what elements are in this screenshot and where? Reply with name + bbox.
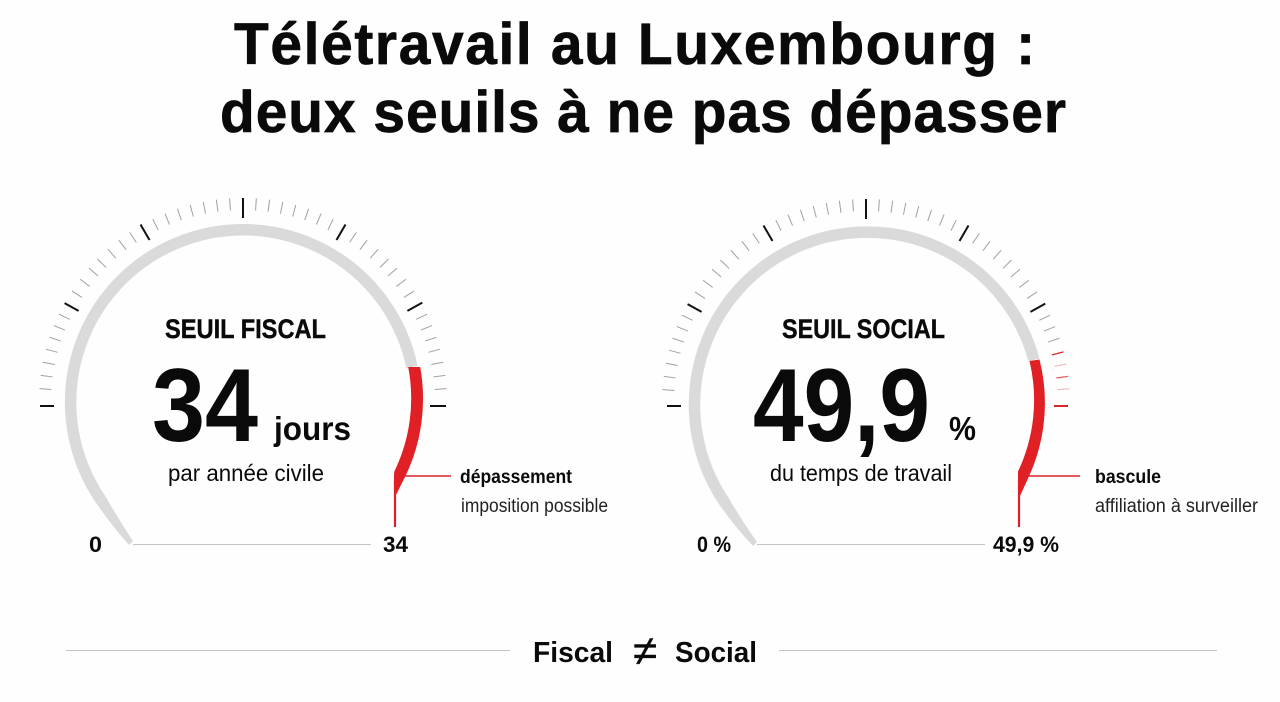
heading: seuil social: SEUIL SOCIAL xyxy=(782,314,945,344)
baseline scale: social xyxy=(757,544,985,546)
value: 49,9 %: % xyxy=(949,410,976,447)
scale label: 34: 34 xyxy=(383,532,409,557)
footer: fiscal differs from social xyxy=(66,627,1217,674)
callout: dépassement xyxy=(405,467,608,517)
footer: fiscal differs from social: ≠ xyxy=(633,627,657,674)
value: 49,9 %: 49,9 xyxy=(753,348,930,464)
caption: par année civile: par année civile xyxy=(168,460,324,486)
gauge scale ticks: social xyxy=(662,199,1070,406)
panel: seuil fiscal gauge xyxy=(39,198,608,557)
heading: seuil fiscal: SEUIL FISCAL xyxy=(165,314,326,344)
red threshold arc: fiscal xyxy=(394,367,423,527)
scale label: 49,9 %: 49,9 % xyxy=(993,532,1059,557)
value: 34 jours xyxy=(152,348,351,464)
callout: bascule xyxy=(1028,467,1259,517)
gauge track: social xyxy=(695,232,1034,546)
footer: fiscal differs from social: Fiscal xyxy=(533,637,613,669)
red threshold arc: social xyxy=(1018,360,1045,527)
title: deux seuils à ne pas dépasser xyxy=(220,80,1066,145)
value: 34 jours: jours xyxy=(273,410,351,447)
scale label: 0 %: 0 % xyxy=(697,532,731,557)
panel: seuil social gauge xyxy=(662,199,1259,557)
footer: fiscal differs from social: Social xyxy=(675,637,757,669)
gauge track: fiscal xyxy=(71,230,412,545)
callout: bascule: bascule xyxy=(1095,467,1161,488)
callout: bascule: affiliation à surveiller xyxy=(1095,496,1259,517)
value: 34 jours: 34 xyxy=(152,348,258,464)
gauge scale ticks: fiscal xyxy=(39,198,447,406)
caption: du temps de travail: du temps de travail xyxy=(770,460,952,486)
callout: dépassement: imposition possible xyxy=(461,496,608,517)
title: Télétravail au Luxembourg : xyxy=(234,12,1035,77)
title xyxy=(220,12,1066,145)
scale label: 0: 0 xyxy=(89,532,102,557)
callout: dépassement: dépassement xyxy=(460,467,573,488)
baseline scale: fiscal xyxy=(133,544,371,546)
